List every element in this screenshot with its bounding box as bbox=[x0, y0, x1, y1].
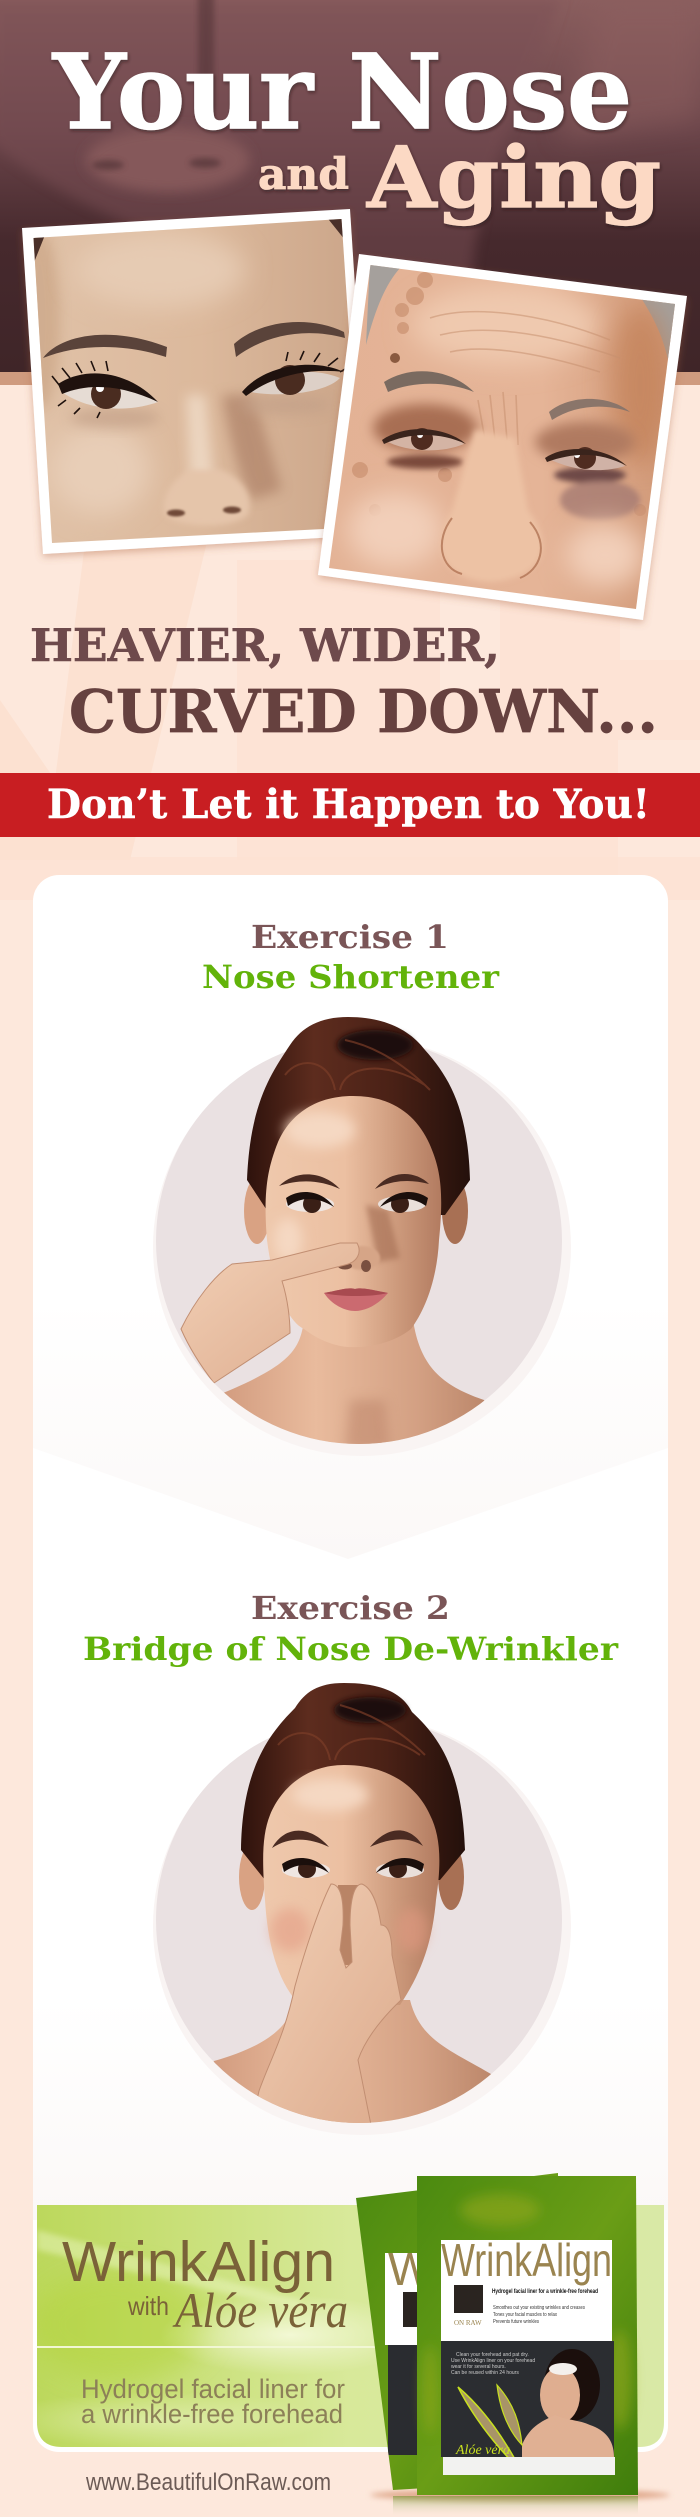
eyebrows bbox=[384, 371, 474, 392]
brows bbox=[279, 1174, 429, 1189]
forehead light bbox=[292, 1779, 368, 1811]
hair corner bbox=[328, 219, 343, 238]
cheek blush bbox=[270, 1908, 428, 1952]
packet white label bbox=[441, 2234, 612, 2341]
face bbox=[263, 1765, 439, 2005]
nose shadow bbox=[222, 395, 282, 500]
neck and shoulders bbox=[170, 2000, 530, 2140]
packet reflection bbox=[393, 2496, 638, 2517]
forehead light bbox=[410, 285, 600, 365]
packet small text: Hydrogel facial liner for a wrinkle-free forehead bbox=[492, 2289, 598, 2295]
lower cheek light bbox=[347, 492, 645, 587]
headline bbox=[30, 619, 658, 746]
photo: young face bbox=[20, 200, 380, 560]
hair strands bbox=[278, 1705, 425, 1760]
packet small text: Prevents future wrinkles bbox=[493, 2319, 539, 2325]
nose tip and nostrils bbox=[338, 1246, 380, 1272]
cheek light bbox=[50, 425, 150, 515]
model hair bbox=[544, 2349, 600, 2421]
tagline: Hydrogel facial liner for bbox=[81, 2374, 345, 2404]
outer ring bbox=[153, 1038, 571, 1456]
exercise 1 heading: Nose Shortener bbox=[202, 958, 500, 996]
packet logo bbox=[454, 2285, 483, 2313]
packet instructions: Use WrinkAlign liner on your forehead bbox=[451, 2358, 535, 2364]
exercise 1 illustration bbox=[153, 1017, 571, 1460]
packet bottom strip bbox=[443, 2457, 615, 2475]
exercise 1 heading bbox=[202, 918, 500, 996]
right eye bbox=[242, 351, 350, 396]
cheek and forehead light bbox=[274, 1112, 355, 1262]
right eye bbox=[376, 1858, 424, 1878]
packet glow patches bbox=[422, 2194, 632, 2435]
left eye bbox=[282, 1858, 330, 1878]
background watermark letters bbox=[0, 385, 700, 900]
packet small text: Tones your facial muscles to relax bbox=[493, 2312, 557, 2318]
model shoulders and hand bbox=[522, 2415, 614, 2457]
grey hair bbox=[366, 265, 675, 360]
aloe leaves bbox=[458, 2387, 522, 2472]
model face bbox=[540, 2367, 580, 2423]
website url: www.BeautifulOnRaw.com bbox=[85, 2469, 331, 2496]
packet instructions: wear it for several hours. bbox=[451, 2364, 506, 2370]
red banner bbox=[0, 773, 700, 837]
outer ring bbox=[153, 1717, 571, 2135]
face bbox=[266, 1096, 441, 1347]
product panel bbox=[0, 2205, 664, 2448]
nose bbox=[164, 470, 250, 526]
eye sockets bbox=[373, 404, 635, 462]
packet aloe vera mark: Alóe véra bbox=[455, 2443, 510, 2458]
tagline bbox=[81, 2374, 345, 2429]
left eye bbox=[286, 1192, 334, 1213]
neck shading bbox=[345, 1400, 390, 1450]
forehead wrinkles bbox=[430, 312, 620, 445]
neck and shoulders bbox=[224, 1324, 484, 1444]
right orange shade bbox=[610, 305, 670, 465]
packet instructions: Can be reused within 24 hours bbox=[451, 2370, 519, 2376]
nose shadow bbox=[366, 1205, 400, 1262]
packet instructions bbox=[451, 2352, 535, 2376]
exercise 2 heading bbox=[83, 1589, 619, 1668]
blurred nose bbox=[86, 128, 250, 192]
title: Aging bbox=[366, 128, 661, 227]
eyebrows bbox=[43, 322, 345, 358]
with aloe vera: Alóe véra bbox=[172, 2282, 348, 2338]
title: and bbox=[258, 150, 349, 200]
brand name: WrinkAlign bbox=[62, 2230, 335, 2294]
title bbox=[52, 32, 661, 227]
packet instructions: Clean your forehead and pat dry. bbox=[456, 2352, 529, 2358]
ears bbox=[239, 1844, 464, 1910]
blurred nostrils bbox=[92, 158, 221, 170]
nose bridge highlight bbox=[186, 395, 214, 480]
blurred face contour bbox=[0, 132, 498, 284]
header band: dark blurred face bbox=[0, 0, 700, 372]
packet dark photo area bbox=[441, 2341, 614, 2472]
headline: HEAVIER, WIDER, bbox=[30, 619, 500, 672]
right eye bbox=[378, 1192, 428, 1213]
lips bbox=[324, 1288, 388, 1311]
forehead light bbox=[75, 232, 245, 308]
mole bbox=[390, 353, 400, 363]
nose between fingers bbox=[335, 1885, 358, 1965]
nose bbox=[441, 430, 542, 582]
photo: older face bbox=[318, 254, 690, 620]
packet: front bbox=[417, 2176, 638, 2495]
packet: back: W bbox=[388, 2243, 432, 2295]
nose outline bbox=[442, 518, 541, 578]
hand with two fingers bbox=[250, 1884, 401, 2130]
main white card bbox=[33, 875, 668, 2452]
exercise 2 heading: Exercise 2 bbox=[251, 1589, 450, 1627]
exercise 2 heading: Bridge of Nose De-Wrinkler bbox=[83, 1630, 619, 1668]
with aloe vera: with bbox=[127, 2291, 169, 2321]
hair dark crown bbox=[337, 1030, 413, 1060]
title: Your Nose bbox=[52, 32, 632, 153]
hair dark crown bbox=[334, 1697, 406, 1723]
packet: back bbox=[356, 2173, 560, 2490]
chevron shape bbox=[33, 1300, 668, 1559]
temple shading bbox=[34, 237, 62, 408]
hair strands bbox=[285, 1040, 430, 1090]
packet small text bbox=[492, 2289, 598, 2325]
ears bbox=[244, 1178, 468, 1244]
back packet label bbox=[385, 2253, 445, 2345]
nostrils bbox=[167, 506, 241, 516]
forehead patch bbox=[549, 2363, 577, 2375]
hand with finger bbox=[181, 1243, 359, 1383]
left eye bbox=[382, 428, 466, 450]
brows bbox=[272, 1830, 423, 1848]
panel divider bbox=[37, 2346, 377, 2348]
left eye bbox=[52, 361, 158, 418]
upper right lighter zone bbox=[567, 47, 696, 138]
red banner: Don’t Let it Happen to You! bbox=[47, 781, 650, 828]
under eye shades bbox=[70, 395, 330, 428]
headline: CURVED DOWN... bbox=[69, 677, 658, 746]
hair bbox=[247, 1017, 470, 1215]
age spots bbox=[352, 272, 646, 521]
hair bbox=[241, 1683, 465, 1880]
packet shadow bbox=[370, 2489, 670, 2501]
exercise 1 heading: Exercise 1 bbox=[251, 918, 449, 956]
bridge shadow bbox=[196, 0, 216, 78]
tagline: a wrinkle-free forehead bbox=[81, 2399, 343, 2429]
packet white label: WrinkAlign bbox=[441, 2234, 612, 2286]
exercise 2 illustration bbox=[153, 1683, 571, 2140]
right eye bbox=[545, 447, 627, 470]
tan strip under header bbox=[0, 372, 700, 385]
packet small text: Smoothes out your existing wrinkles and creases bbox=[493, 2305, 585, 2311]
packet white label: ON RAW bbox=[454, 2319, 482, 2327]
under-eye bags bbox=[387, 455, 640, 520]
